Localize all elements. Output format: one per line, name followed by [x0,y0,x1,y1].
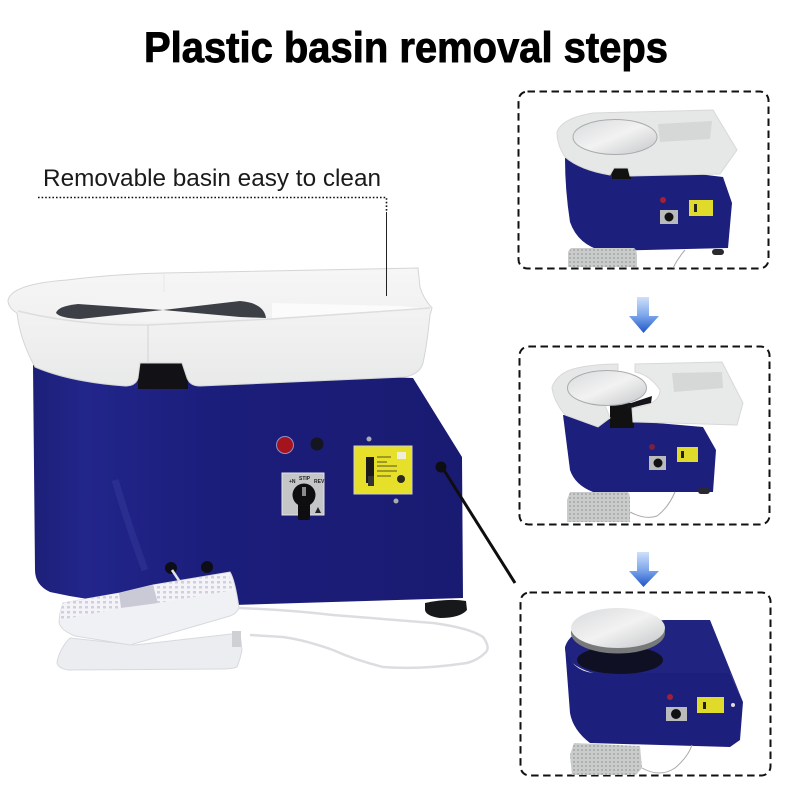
basin right part [632,362,743,425]
main product: pottery wheel [8,268,515,670]
switch [666,707,687,721]
rotary switch: +N [289,479,296,485]
rear sockets [165,562,177,574]
body front [565,647,743,747]
arrow: step 2 to step 3 [629,552,659,587]
compartment [672,372,723,392]
rotary switch: STIP [299,476,311,482]
panel: step 2 basin separated [520,346,770,524]
mount [610,403,634,428]
pedal cable [239,608,488,668]
rotary switch: REV [314,479,325,485]
foot [712,249,724,255]
callout: removable basin: Removable basin easy to clean [43,165,381,192]
machine body [33,365,463,606]
title: Plastic basin removal steps [144,24,668,72]
indicator [667,694,673,700]
switch [649,456,666,470]
control plate [697,697,724,713]
body top [565,620,743,702]
hub shadow [577,646,663,674]
fuse [310,438,324,450]
indicator [660,197,666,203]
panel: step 3 basin removed [520,592,770,776]
pedal [567,492,630,522]
jack [731,703,735,707]
basin compartment [272,303,420,318]
cable [673,250,685,268]
pedal [568,248,637,267]
rotary switch [282,473,325,520]
control plate [689,200,713,216]
cable [630,492,675,517]
foot [698,488,710,494]
hub shadow [626,396,652,409]
yellow control panel [354,446,412,494]
power cord [436,462,515,583]
pedal [570,743,642,775]
disc rim [571,612,665,654]
basin left part [552,364,618,427]
plastic basin [8,268,432,386]
black mount under basin [138,360,188,389]
power indicator [276,436,294,454]
panel screws [366,436,372,442]
disc [571,608,665,648]
disc [568,370,646,406]
disc [56,292,266,322]
mount [612,166,631,179]
rubber foot [425,600,467,618]
basin [557,110,737,176]
body [565,158,732,251]
arrow: step 1 to step 2 [629,297,659,333]
control plate [677,447,698,462]
indicator [649,444,655,450]
panel: step 1 basin attached [518,92,768,268]
callout: removable basin [38,165,386,296]
socket wire [172,570,180,582]
disc [573,120,657,154]
body [563,415,716,492]
foot pedal [57,572,242,670]
cable [642,745,692,773]
switch [660,210,678,224]
compartment [658,121,712,142]
